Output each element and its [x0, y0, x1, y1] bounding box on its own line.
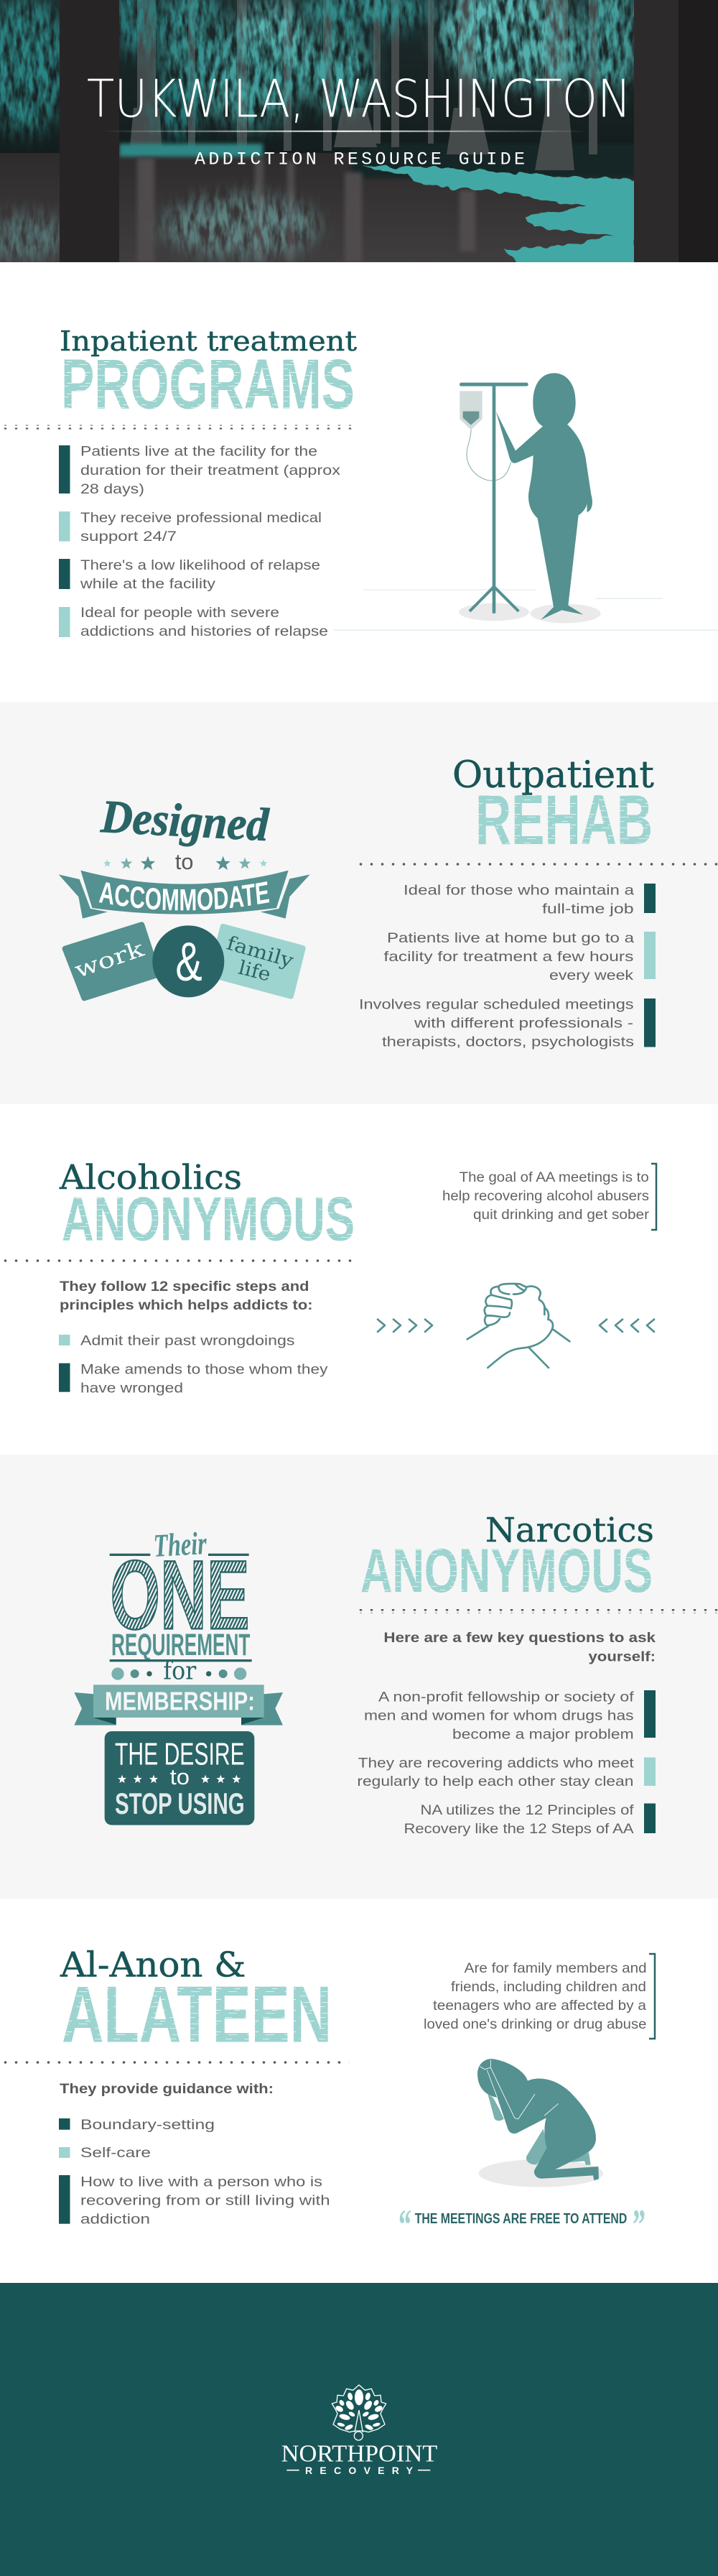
hero photo: teal reflections	[0, 196, 320, 260]
bullet 3: with different professionals -	[414, 1016, 633, 1032]
callout: goal of AA: The goal of AA meetings is to	[460, 1169, 649, 1185]
bullet 1: 28 days)	[80, 481, 144, 497]
bullet list: outpatient facts	[359, 882, 656, 1050]
heading: outpatient: Outpatient	[452, 754, 654, 797]
word: to: to	[175, 850, 193, 874]
bullet list: AA	[59, 1333, 328, 1396]
intro text: They follow 12 specific steps and	[60, 1279, 309, 1294]
bullet 2: have wronged	[80, 1381, 183, 1396]
bullet 2: Make amends to those whom they	[80, 1362, 328, 1378]
circle with ampersand: &	[175, 932, 202, 993]
hero photo: teal foliage	[0, 0, 640, 136]
bullet 2: They receive professional medical	[80, 510, 322, 526]
box: the desire to stop using	[105, 1731, 254, 1825]
bullet 1: Boundary-setting	[80, 2117, 215, 2133]
bullet 1: full-time job	[542, 902, 634, 917]
bullet 1: Ideal for those who maintain a	[404, 882, 634, 898]
illustration: patient with IV drip	[334, 373, 718, 630]
heading: anonymous: ANONYMOUS	[62, 1185, 355, 1254]
panel: inpatient treatment programs	[0, 262, 718, 702]
bullet 2: every week	[549, 968, 633, 983]
hero photo: teal water	[362, 167, 635, 267]
script heading: Designed	[99, 791, 271, 851]
bullet 4: Ideal for people with severe	[80, 605, 279, 621]
heading: narcotics: Narcotics	[485, 1511, 654, 1550]
subtitle: ADDICTION RESOURCE GUIDE	[195, 149, 525, 170]
arrows pointing right	[378, 1320, 432, 1332]
word: requirement: REQUIREMENT	[111, 1628, 250, 1662]
callout: who it is for: friends, including children and	[451, 1979, 646, 1995]
bullet 1: A non-profit fellowship or society of	[378, 1689, 634, 1705]
main title: TUKWILA, WASHINGTON	[87, 69, 631, 129]
heading: alateen: ALATEEN	[62, 1970, 332, 2060]
bullet 2: Patients live at home but go to a	[387, 930, 634, 946]
bullet 1: men and women for whom drugs has	[364, 1708, 634, 1724]
panel: al-anon and alateen	[0, 1899, 718, 2283]
hands	[467, 1284, 569, 1368]
bullet 3: Recovery like the 12 Steps of AA	[404, 1821, 633, 1837]
icon: clasped hands with arrows	[378, 1284, 654, 1368]
intro text: principles which helps addicts to:	[60, 1297, 313, 1313]
callout: who it is for: Are for family members and	[465, 1960, 647, 1976]
circle with ampersand	[152, 925, 224, 997]
hero photo: dark far shore	[352, 144, 639, 178]
bullet 3	[404, 1802, 656, 1837]
dots and word: for: for	[163, 1657, 197, 1685]
panel: hero header	[0, 0, 718, 267]
callout: goal of AA: quit drinking and get sober	[473, 1207, 650, 1223]
bullet 3	[59, 2174, 330, 2227]
bullet 1	[59, 2117, 215, 2133]
bullet 3: There's a low likelihood of relapse	[80, 557, 320, 573]
bullet 1: Patients live at the facility for the	[80, 444, 317, 460]
bullet 3: Involves regular scheduled meetings	[359, 997, 634, 1013]
dots and word: for	[111, 1657, 246, 1685]
script word: their: Their	[153, 1525, 208, 1564]
bullet 2: support 24/7	[80, 529, 177, 545]
box: the desire to stop using: STOP USING	[115, 1787, 245, 1820]
hero photo: background tree trunks	[129, 0, 597, 170]
badge: their one requirement for membership	[74, 1525, 283, 1825]
quote: meetings are free: ”	[633, 2201, 645, 2248]
ribbon word: ACCOMMODATE	[99, 881, 270, 911]
bullet 3: recovering from or still living with	[80, 2192, 330, 2208]
bullet 3: addiction	[80, 2211, 150, 2227]
panel: outpatient rehab	[0, 702, 718, 1104]
quote: meetings are free	[398, 2201, 645, 2248]
stars	[103, 856, 267, 870]
bullet 3	[359, 997, 656, 1050]
arrows pointing left	[600, 1320, 654, 1332]
bullet 1	[364, 1689, 656, 1742]
bullet 3	[59, 557, 320, 592]
hero photo: far bank	[119, 144, 263, 157]
callout: goal of AA	[442, 1164, 656, 1230]
quote: meetings are free: THE MEETINGS ARE FREE TO ATTEND	[415, 2210, 627, 2227]
badge: designed to accommodate work and family life	[59, 791, 310, 1001]
card: family life: family	[224, 932, 296, 973]
hero photo: tree reflections	[137, 158, 475, 262]
callout: who it is for: teenagers who are affected by a	[433, 1998, 646, 2014]
footer	[0, 2283, 718, 2576]
card: family life: life	[236, 957, 273, 986]
title rule	[101, 131, 589, 132]
intro text: yourself:	[589, 1649, 656, 1665]
box: the desire to stop using: THE DESIRE	[115, 1737, 245, 1772]
heading: al-anon: Al-Anon &	[60, 1946, 246, 1986]
bullet list: inpatient facts	[59, 444, 340, 639]
hatched word: one: ONE	[110, 1539, 250, 1649]
intro text: Here are a few key questions to ask	[383, 1630, 656, 1646]
bullet 3: while at the facility	[80, 576, 215, 592]
bullet 1	[59, 444, 340, 497]
heading: programs: PROGRAMS	[61, 345, 355, 424]
bullet 2	[357, 1755, 656, 1789]
logo wordmark: RECOVERY	[305, 2465, 414, 2476]
card: work: work	[72, 937, 147, 983]
bullet 2	[59, 1362, 328, 1396]
callout: who it is for: loved one's drinking or drug abuse	[424, 2016, 646, 2032]
bullet 4: addictions and histories of relapse	[80, 624, 328, 639]
bullet 1	[404, 882, 656, 917]
box: the desire to stop using: to	[170, 1765, 190, 1789]
bullet 3: therapists, doctors, psychologists	[382, 1034, 634, 1050]
card: work	[65, 925, 158, 998]
bullet 2	[59, 2145, 151, 2161]
illustration: kneeling person	[477, 2059, 603, 2187]
quote: meetings are free: “	[398, 2201, 411, 2248]
panel: narcotics anonymous	[0, 1455, 718, 1899]
intro text	[383, 1630, 656, 1665]
bullet 1: become a major problem	[452, 1726, 634, 1742]
bullet 1: Admit their past wrongdoings	[80, 1333, 295, 1349]
bullet 2: Self-care	[80, 2145, 151, 2161]
heading: inpatient treatment: Inpatient treatment	[60, 325, 358, 358]
bullet 2	[383, 930, 656, 983]
heading: alcoholics: Alcoholics	[59, 1158, 242, 1197]
hero photo: foreground trunks	[60, 0, 718, 262]
bullet 1: duration for their treatment (approx	[80, 463, 340, 478]
bullet 2	[59, 510, 322, 545]
bullet 3: NA utilizes the 12 Principles of	[421, 1802, 634, 1818]
intro text	[60, 1279, 313, 1313]
logo: leaf emblem	[332, 2385, 386, 2440]
bullet 4	[59, 605, 328, 639]
bullet 2: regularly to help each other stay clean	[357, 1774, 633, 1789]
bullet 2: facility for treatment a few hours	[383, 949, 634, 965]
ribbon	[59, 871, 310, 919]
bullet list: NA	[357, 1689, 656, 1837]
intro text: They provide guidance with:	[60, 2081, 274, 2097]
callout: goal of AA: help recovering alcohol abusers	[442, 1188, 649, 1204]
bullet 3: How to live with a person who is	[80, 2174, 322, 2190]
card: family life	[210, 927, 303, 996]
callout: who it is for	[424, 1954, 655, 2039]
bullet list: guidance	[59, 2117, 330, 2227]
ribbon: membership: MEMBERSHIP:	[105, 1687, 255, 1716]
panel: alcoholics anonymous	[0, 1104, 718, 1455]
ribbon: membership	[74, 1685, 283, 1725]
bullet 2: They are recovering addicts who meet	[358, 1755, 634, 1771]
logo wordmark: NORTHPOINT	[281, 2441, 438, 2468]
